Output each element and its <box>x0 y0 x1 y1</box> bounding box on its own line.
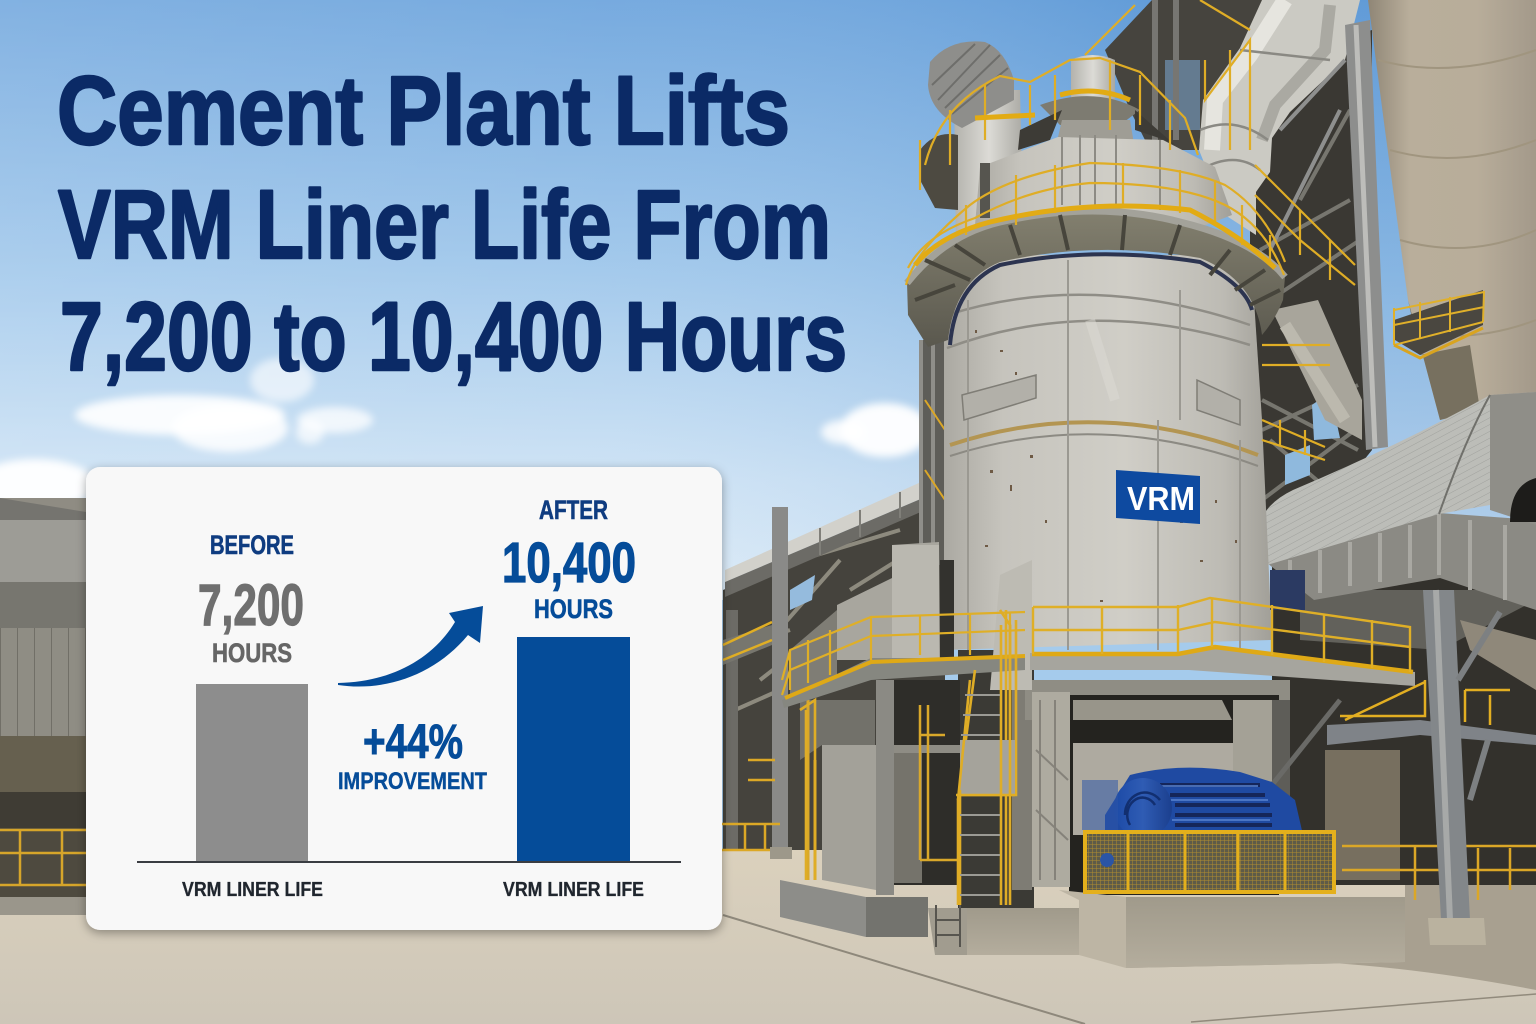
after heading: AFTER <box>539 495 608 525</box>
equipment box <box>790 542 1305 700</box>
chart baseline <box>137 861 681 863</box>
cast shadow on the ground <box>1126 885 1536 990</box>
arched conveyor hood <box>1258 392 1536 610</box>
support frame under the platforms <box>800 650 1340 908</box>
left platform <box>782 612 1025 708</box>
title: Cement Plant Lifts <box>57 56 790 165</box>
ducts <box>1199 0 1362 440</box>
platform bowl around the tower <box>907 211 1285 347</box>
background: sky <box>0 0 1536 600</box>
plinths <box>780 880 1405 968</box>
improvement label: IMPROVEMENT <box>338 768 487 795</box>
cyclone pipes on top of the tower <box>920 41 1175 250</box>
before axis label: VRM LINER LIFE <box>182 878 323 901</box>
ground <box>0 850 1536 1024</box>
steel column left of the tower <box>921 340 945 565</box>
before heading: BEFORE <box>210 530 294 560</box>
VRM sign <box>1116 470 1200 524</box>
before value: 7,200 <box>198 573 304 638</box>
yellow mesh guard <box>1085 832 1334 892</box>
left pipe rack <box>722 478 945 859</box>
yellow platform edge <box>915 91 1275 268</box>
steel structure behind the tower <box>1105 0 1372 520</box>
yellow walkways at the tower top <box>906 0 1355 460</box>
safety rail and column at right <box>1342 590 1536 945</box>
after axis label: VRM LINER LIFE <box>503 878 644 901</box>
title: VRM Liner Life From <box>58 170 831 279</box>
tower upper cone <box>975 135 1232 235</box>
access ladders <box>800 610 1016 905</box>
right platform <box>1030 598 1415 686</box>
before unit: HOURS <box>212 638 292 668</box>
panel: before and after chart <box>86 467 722 930</box>
icon: growth arrow <box>338 606 483 687</box>
VRM sign: VRM <box>1127 480 1195 517</box>
after unit: HOURS <box>534 594 613 624</box>
bar: after <box>517 637 630 862</box>
icon: blue motor <box>1082 768 1303 838</box>
improvement percentage: +44% <box>363 716 463 769</box>
left background building <box>0 498 86 915</box>
right steel structure <box>1272 560 1536 885</box>
silo access platform <box>1394 290 1484 358</box>
tower main body <box>944 255 1272 650</box>
after value: 10,400 <box>502 531 636 595</box>
steel column <box>1270 20 1388 450</box>
clouds <box>0 358 930 509</box>
concrete silo <box>1368 0 1536 420</box>
title <box>57 56 847 391</box>
title: 7,200 to 10,400 Hours <box>60 282 847 391</box>
bar: before <box>196 684 308 862</box>
